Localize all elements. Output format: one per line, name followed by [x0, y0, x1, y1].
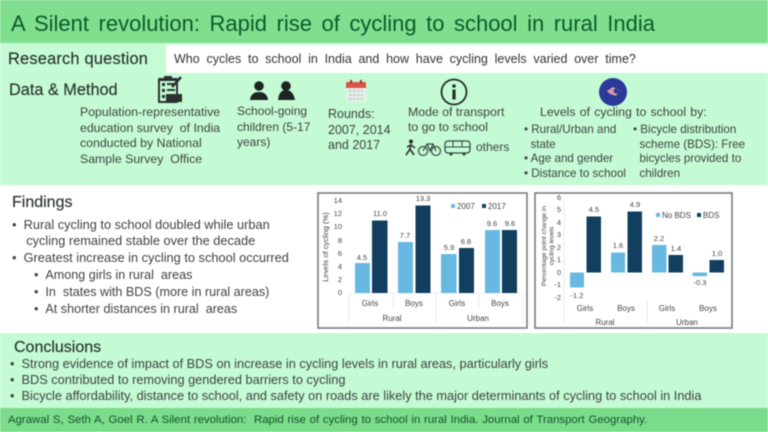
y axis labels: -1: [554, 280, 561, 289]
text: mode of transport: [408, 105, 505, 134]
research question text: Who cycles to school in India and how have cycling levels varied over time?: [174, 52, 636, 66]
text: rounds: [328, 107, 391, 152]
text: mode of transport: to go to school: [408, 120, 488, 134]
category labels: [362, 299, 509, 323]
text: levels of cycling heading: Levels of cycling to school by:: [540, 105, 707, 119]
y axis labels: 1: [557, 255, 561, 264]
category labels: Girls: [449, 299, 465, 308]
y axis title: Levels of cycling (%): [321, 212, 330, 282]
y axis labels: 2: [557, 243, 561, 252]
text: school-going children: [236, 104, 310, 150]
category labels: Boys: [699, 304, 717, 313]
category labels: Girls: [362, 299, 378, 308]
y axis title: cycling levels: [548, 226, 556, 265]
y axis labels: 3: [557, 230, 561, 239]
footer citation: [0, 408, 768, 432]
title banner: [0, 0, 768, 43]
text: school-going children: years): [237, 135, 270, 149]
finding 2 sub-points: • At shorter distances in rural areas: [34, 302, 237, 316]
list: levels of cycling left: • Age and gender: [524, 152, 613, 165]
category labels: Boys: [405, 299, 423, 308]
text: rounds: and 2017: [328, 138, 380, 152]
value labels: 1.6: [613, 241, 623, 250]
legend: [451, 202, 506, 211]
bars: [570, 212, 724, 288]
legend: 2007: [457, 202, 475, 211]
heading: findings: Findings: [12, 194, 72, 211]
y axis title: Percentage point change in: [541, 206, 548, 286]
legend: BDS: [703, 211, 719, 220]
category labels: Urban: [676, 318, 698, 327]
value labels: [571, 200, 722, 300]
value labels: 1.0: [712, 249, 722, 258]
text: school-going children: children (5-17: [237, 120, 310, 134]
y axis labels: 2: [338, 275, 342, 284]
list: levels of cycling right: children: [639, 167, 680, 180]
y axis labels: 10: [334, 222, 342, 231]
icon: two children: [249, 80, 296, 101]
finding 1: • Rural cycling to school doubled while urban: [12, 217, 270, 232]
y axis labels: 4: [557, 218, 561, 227]
value labels: 9.6: [505, 219, 515, 228]
category labels: Girls: [577, 304, 593, 313]
value labels: 9.6: [487, 219, 497, 228]
y axis labels: [554, 193, 561, 302]
research question text box: [166, 45, 768, 73]
list: levels of cycling left: • Distance to school: [524, 167, 626, 180]
panel: data and method: [0, 73, 768, 185]
chart: levels of cycling 2007 vs 2017: [316, 192, 528, 330]
axis line: [564, 198, 647, 323]
value labels: [357, 194, 515, 262]
value labels: 5.9: [444, 243, 454, 252]
list: levels of cycling left: state: [530, 138, 556, 151]
text: survey description: [80, 105, 221, 166]
icon: clipboard survey: [157, 75, 183, 104]
legend: 2017: [488, 202, 506, 211]
text: survey description: Population-representative: [80, 105, 220, 119]
y axis labels: 14: [334, 196, 342, 205]
category labels: Rural: [595, 318, 615, 327]
panel: research question: [0, 43, 768, 73]
conclusions list: • Strong evidence of impact of BDS on increase in cycling levels in rural areas, particularly girls: [10, 356, 548, 371]
category labels: Boys: [617, 304, 635, 313]
value labels: -0.3: [694, 278, 706, 287]
value labels: 1.4: [671, 244, 681, 253]
category labels: Rural: [382, 314, 402, 323]
icon: calendar: [345, 79, 367, 102]
chart: change in cycling by BDS: [534, 192, 734, 330]
y axis labels: 0: [338, 288, 342, 297]
list: levels of cycling right: [632, 123, 746, 180]
icon: bicycle scheme badge: [598, 77, 628, 107]
y axis labels: 5: [557, 205, 561, 214]
y axis labels: 4: [338, 262, 342, 271]
y axis labels: -2: [554, 293, 561, 302]
category labels: Urban: [467, 314, 489, 323]
heading: conclusions: Conclusions: [14, 339, 101, 356]
list: levels of cycling left: [524, 123, 626, 180]
value labels: 11.0: [373, 209, 387, 218]
list: levels of cycling left: • Rural/Urban and: [524, 123, 616, 136]
legend: No BDS: [662, 211, 691, 220]
finding 2 sub-points: • Among girls in rural areas: [34, 268, 192, 282]
y axis labels: 8: [338, 236, 342, 245]
finding 2 sub-points: • In states with BDS (more in rural areas): [34, 285, 269, 299]
text: survey description: Sample Survey Office: [80, 152, 202, 166]
value labels: 4.9: [630, 200, 640, 209]
list: levels of cycling right: scheme (BDS): Free: [639, 138, 745, 151]
conclusions list: • Bicycle affordability, distance to school, and safety on roads are likely the major determinants of cycling to school in India: [10, 388, 701, 403]
list: levels of cycling right: • Bicycle distribution: [633, 123, 736, 136]
text: others: others: [476, 140, 509, 154]
legend: [656, 211, 719, 220]
y axis labels: 0: [557, 268, 561, 277]
finding 1: [12, 217, 270, 248]
text: survey description: education survey of India: [80, 120, 220, 134]
y axis labels: 6: [557, 193, 561, 202]
conclusions list: [10, 356, 702, 404]
y axis labels: 12: [334, 209, 342, 218]
heading: research question: Research question: [8, 50, 148, 68]
conclusions list: • BDS contributed to removing gendered barriers to cycling: [10, 372, 345, 387]
title: A Silent revolution: Rapid rise of cycling to school in rural India: [11, 11, 655, 36]
y axis labels: 6: [338, 249, 342, 258]
text: survey description: conducted by National: [80, 136, 202, 150]
value labels: 7.7: [400, 231, 410, 240]
panel: conclusions: [0, 333, 768, 408]
category labels: Girls: [659, 304, 675, 313]
value labels: 13.3: [416, 194, 430, 203]
heading: data and method: Data & Method: [9, 81, 118, 99]
findings list: [12, 217, 289, 316]
list: levels of cycling right: bicycles provided to: [639, 152, 741, 165]
text: rounds: Rounds:: [328, 107, 375, 121]
bars: [355, 206, 517, 293]
panel: findings: [0, 185, 768, 333]
value labels: 4.5: [357, 253, 367, 262]
text: rounds: 2007, 2014: [328, 122, 391, 136]
category labels: Boys: [491, 299, 509, 308]
finding 2: • Greatest increase in cycling to school occurred: [12, 250, 289, 265]
value labels: 6.8: [461, 237, 471, 246]
icon: information circle: [440, 78, 468, 106]
finding 1: cycling remained stable over the decade: [26, 232, 255, 248]
value labels: -1.2: [571, 291, 583, 300]
value labels: 2.2: [654, 234, 664, 243]
citation text: Agrawal S, Seth A, Goel R. A Silent revolution: Rapid rise of cycling to school in rural India. Journal of Transport Geography.: [8, 414, 647, 426]
category labels: [577, 304, 717, 327]
value labels: 4.5: [589, 205, 599, 214]
y axis labels: [334, 196, 342, 297]
text: school-going children: School-going: [237, 104, 307, 118]
icons: walking, bicycle and bus: [404, 138, 472, 157]
finding 2 sub-points: [34, 268, 270, 316]
text: mode of transport: Mode of transport: [408, 105, 504, 119]
